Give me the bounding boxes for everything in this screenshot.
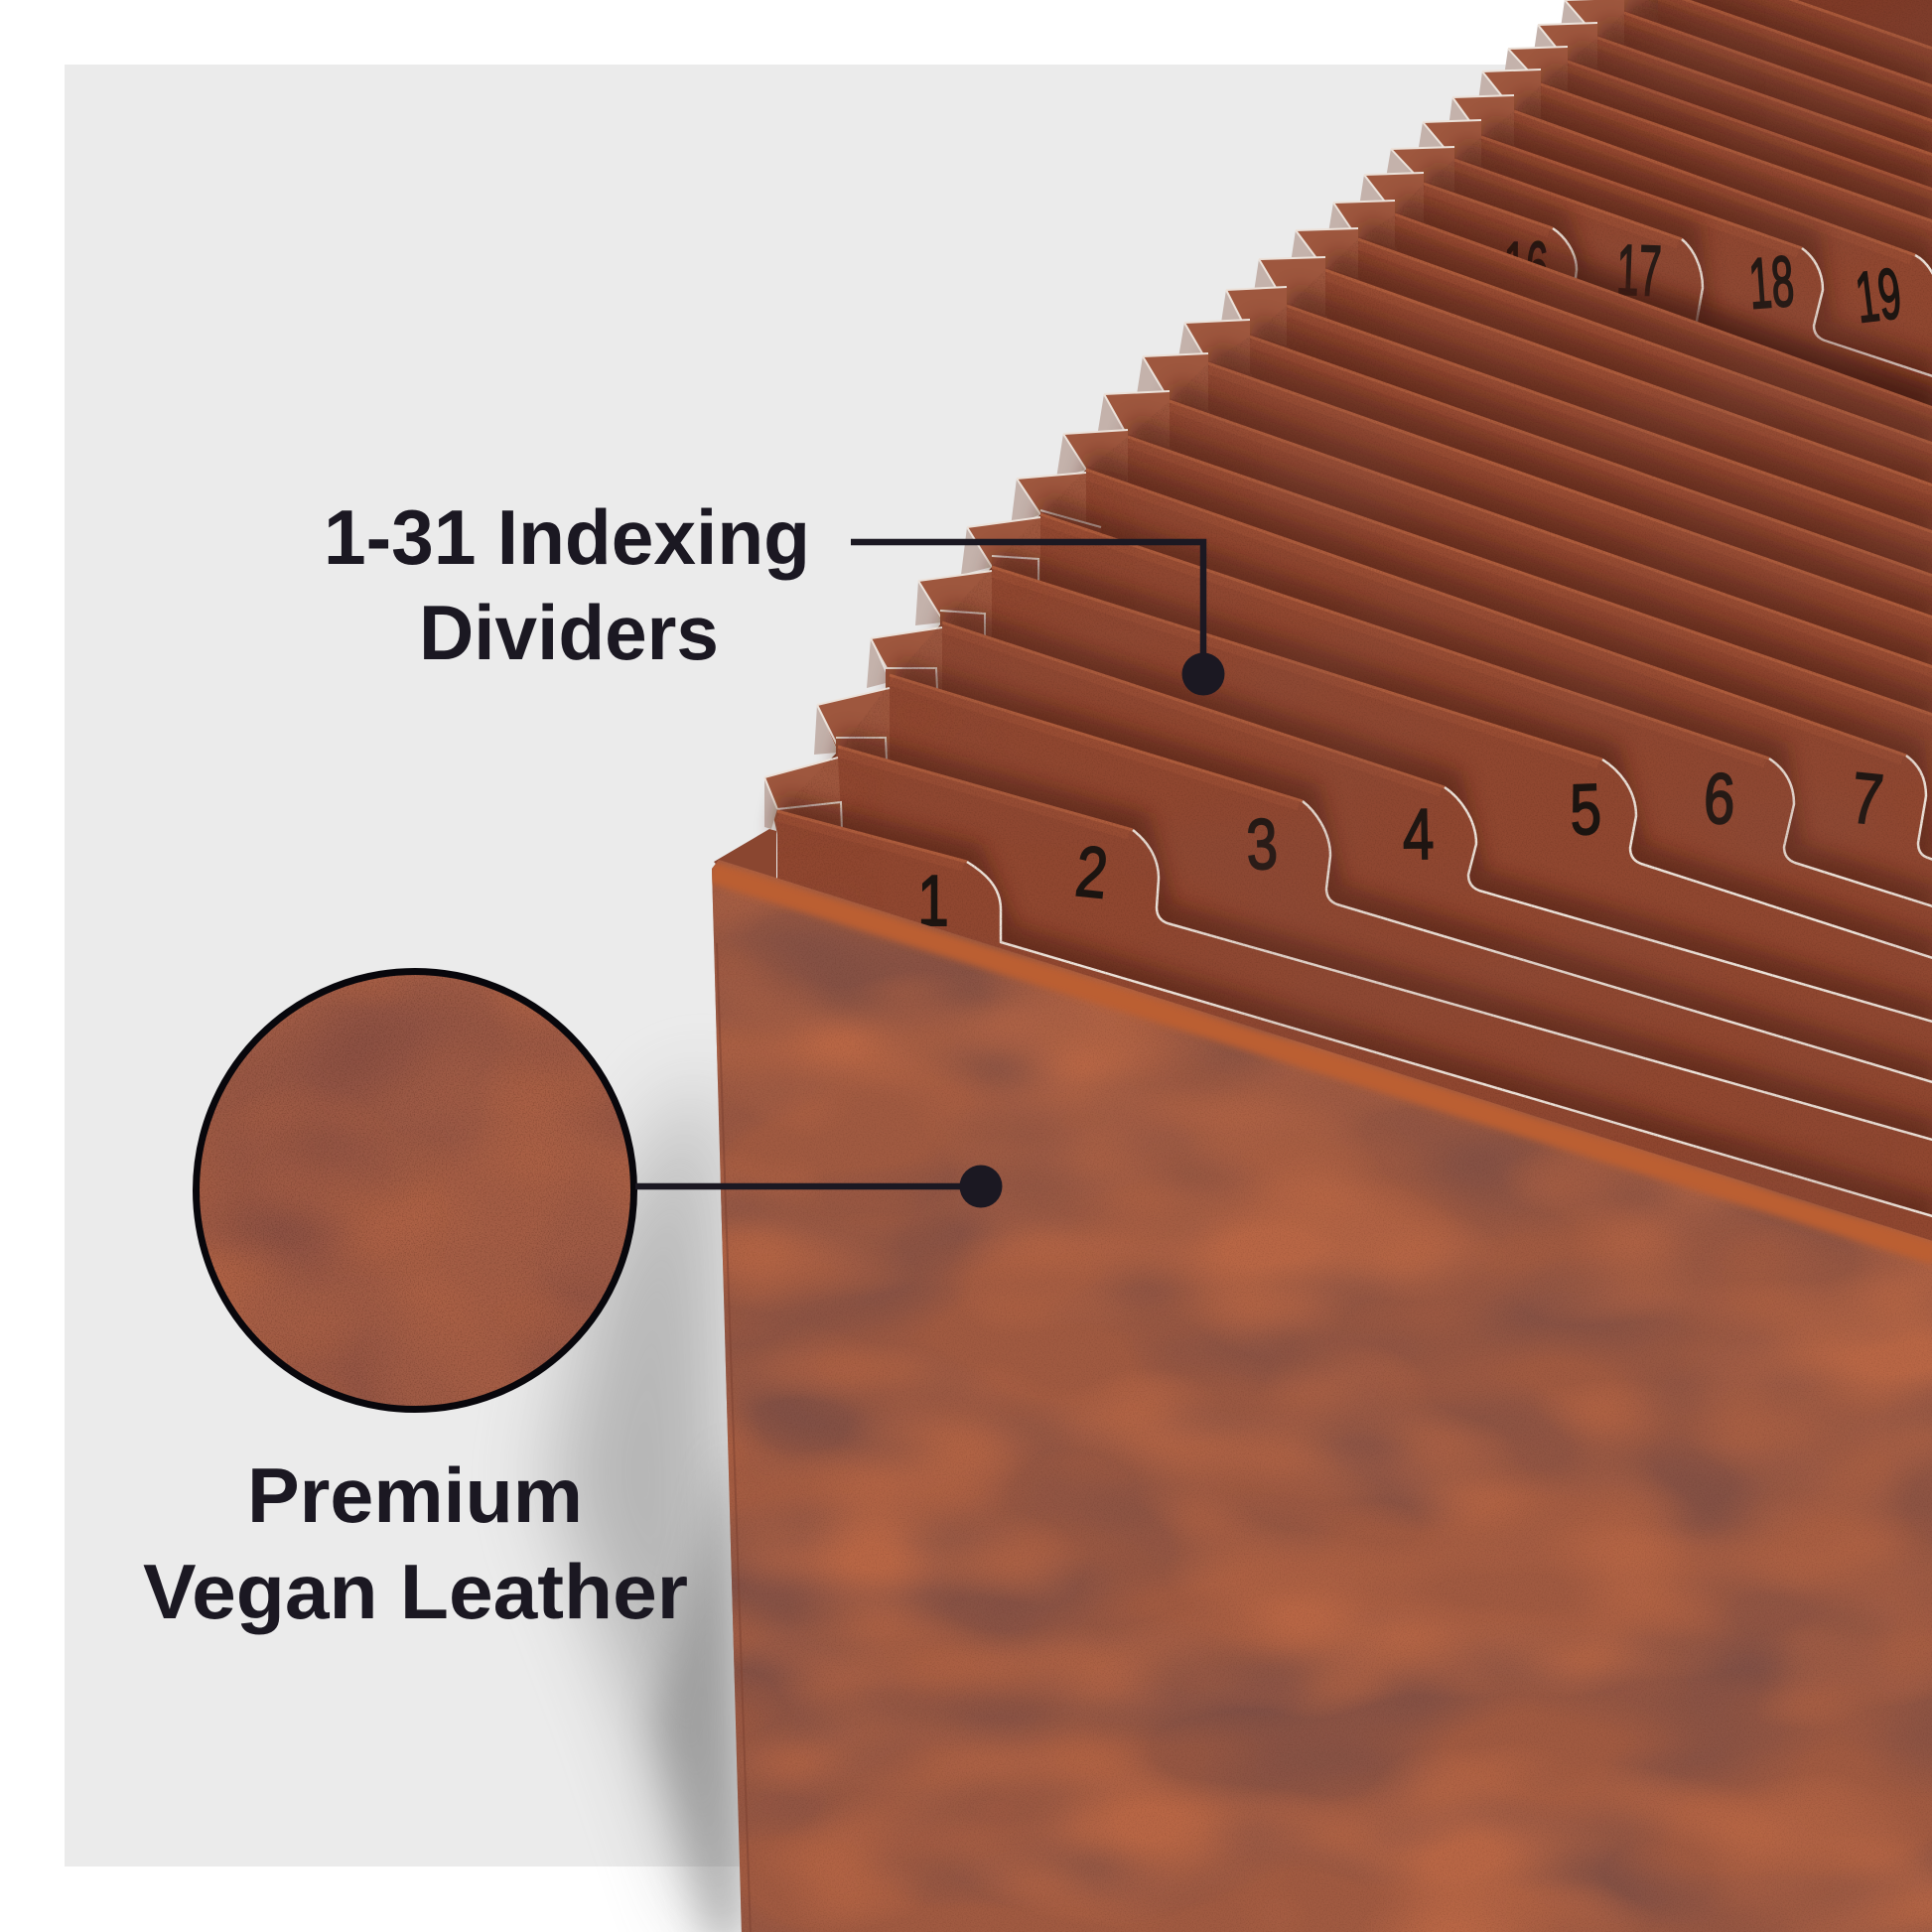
divider tab 1	[764, 758, 1932, 1932]
leader dot	[959, 1166, 1003, 1207]
top callout: 1-31 indexing dividers	[324, 493, 1225, 695]
divider tab 4	[915, 571, 1932, 1932]
divider tab 16	[1384, 147, 1932, 1932]
leader dot	[1181, 653, 1225, 695]
rear cover flap	[714, 829, 776, 894]
product shadow	[551, 1072, 747, 1932]
leader line	[851, 542, 1203, 674]
folder accordion base	[777, 0, 1932, 1932]
leather swatch circle	[189, 963, 641, 1416]
number 18: 18	[1746, 241, 1796, 325]
callout text: 1-31 Indexing	[324, 493, 810, 581]
cover rim highlight	[710, 872, 1932, 1254]
number 4: 4	[1402, 794, 1435, 875]
divider tab 17	[1416, 120, 1932, 1932]
front leather cover	[695, 844, 1932, 1932]
number 5: 5	[1569, 769, 1602, 850]
callout text: Premium	[247, 1451, 583, 1539]
divider tab 19	[1476, 69, 1932, 1932]
callout text	[143, 1451, 688, 1635]
callout text: Dividers	[419, 589, 719, 676]
callout text	[324, 493, 810, 676]
number 17: 17	[1615, 230, 1663, 312]
number 7: 7	[1848, 758, 1886, 840]
divider tab 3	[867, 627, 1932, 1932]
bottom callout: premium vegan leather	[143, 963, 1003, 1635]
number 6: 6	[1703, 759, 1736, 839]
indexing dividers and accordion folds	[714, 0, 1932, 1932]
divider tab 7	[1056, 430, 1932, 1932]
divider paper texture	[777, 0, 1932, 1239]
number 3: 3	[1245, 804, 1279, 885]
divider tab 6	[1011, 473, 1932, 1932]
divider tab 18	[1447, 95, 1932, 1932]
callout text: Vegan Leather	[143, 1548, 688, 1635]
plain dividers 15 to 8	[1096, 173, 1932, 1932]
number 16: 16	[1504, 228, 1548, 308]
number 19: 19	[1852, 254, 1905, 339]
number 2: 2	[1072, 831, 1111, 913]
divider tab 2	[814, 688, 1932, 1932]
number 1: 1	[917, 861, 949, 941]
divider tab 5	[961, 517, 1932, 1932]
leader line	[635, 1183, 981, 1189]
rear plain dividers	[1502, 0, 1932, 1932]
